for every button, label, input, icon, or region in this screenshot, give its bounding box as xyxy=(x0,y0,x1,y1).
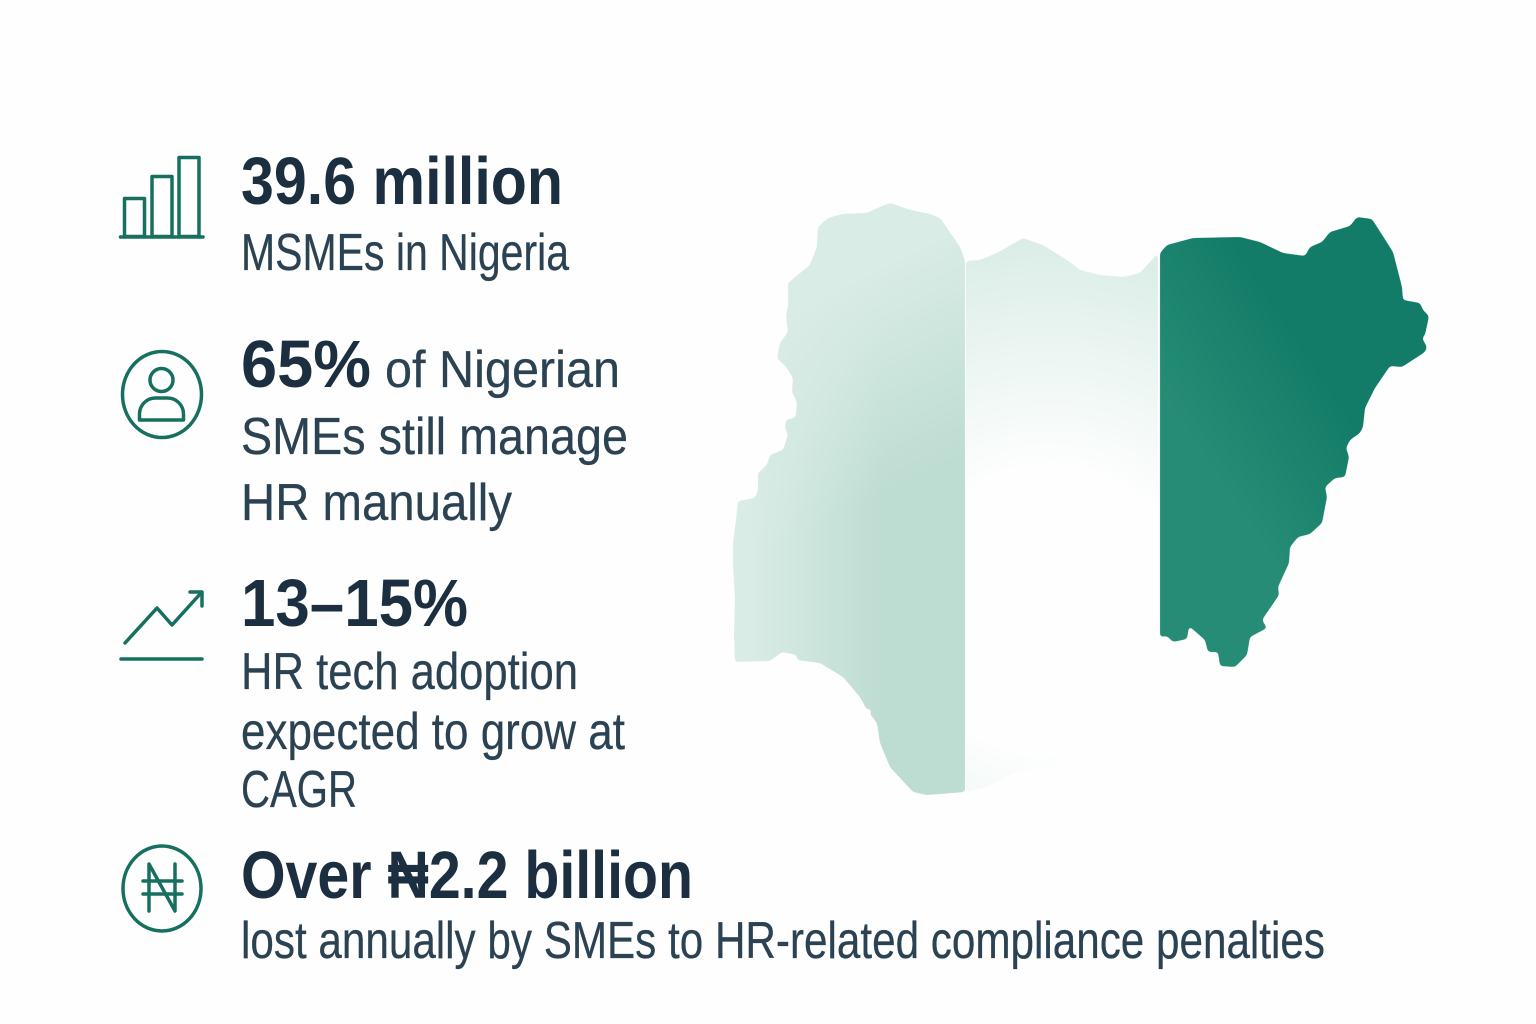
stat: Over ₦2.2 billion penalties xyxy=(241,838,1325,970)
stat: 65% manage HR manually: 65% xyxy=(241,327,371,402)
icon: trend arrow xyxy=(121,592,202,659)
stat: 13–15% HR tech adoption: HR tech adoption xyxy=(241,643,578,701)
stat: 65% manage HR manually xyxy=(241,327,628,532)
stat: 39.6 million MSMEs xyxy=(241,144,569,282)
stat: 13–15% HR tech adoption: expected to grow at xyxy=(241,703,625,761)
icon: bar chart xyxy=(120,158,203,237)
stat: 65% manage HR manually: HR manually xyxy=(241,474,512,532)
icon: naira coin xyxy=(123,846,201,931)
map: centre band xyxy=(966,238,1158,792)
stat: 13–15% HR tech adoption: CAGR xyxy=(241,761,357,819)
stat: 39.6 million MSMEs: MSMEs in Nigeria xyxy=(241,224,569,282)
stat: 13–15% HR tech adoption xyxy=(241,566,625,819)
map: Nigeria in flag colours xyxy=(733,203,1429,795)
stat: Over ₦2.2 billion penalties: Over ₦2.2 billion xyxy=(241,838,693,913)
map: west band xyxy=(733,203,965,795)
stat: 39.6 million MSMEs: 39.6 million xyxy=(241,144,563,219)
stat: 65% manage HR manually: SMEs still manage xyxy=(241,408,628,466)
map: east band xyxy=(1160,217,1429,667)
stat: 13–15% HR tech adoption: 13–15% xyxy=(241,566,468,641)
icon: person in circle xyxy=(122,352,202,438)
stat: 65% manage HR manually: of Nigerian xyxy=(385,341,620,399)
